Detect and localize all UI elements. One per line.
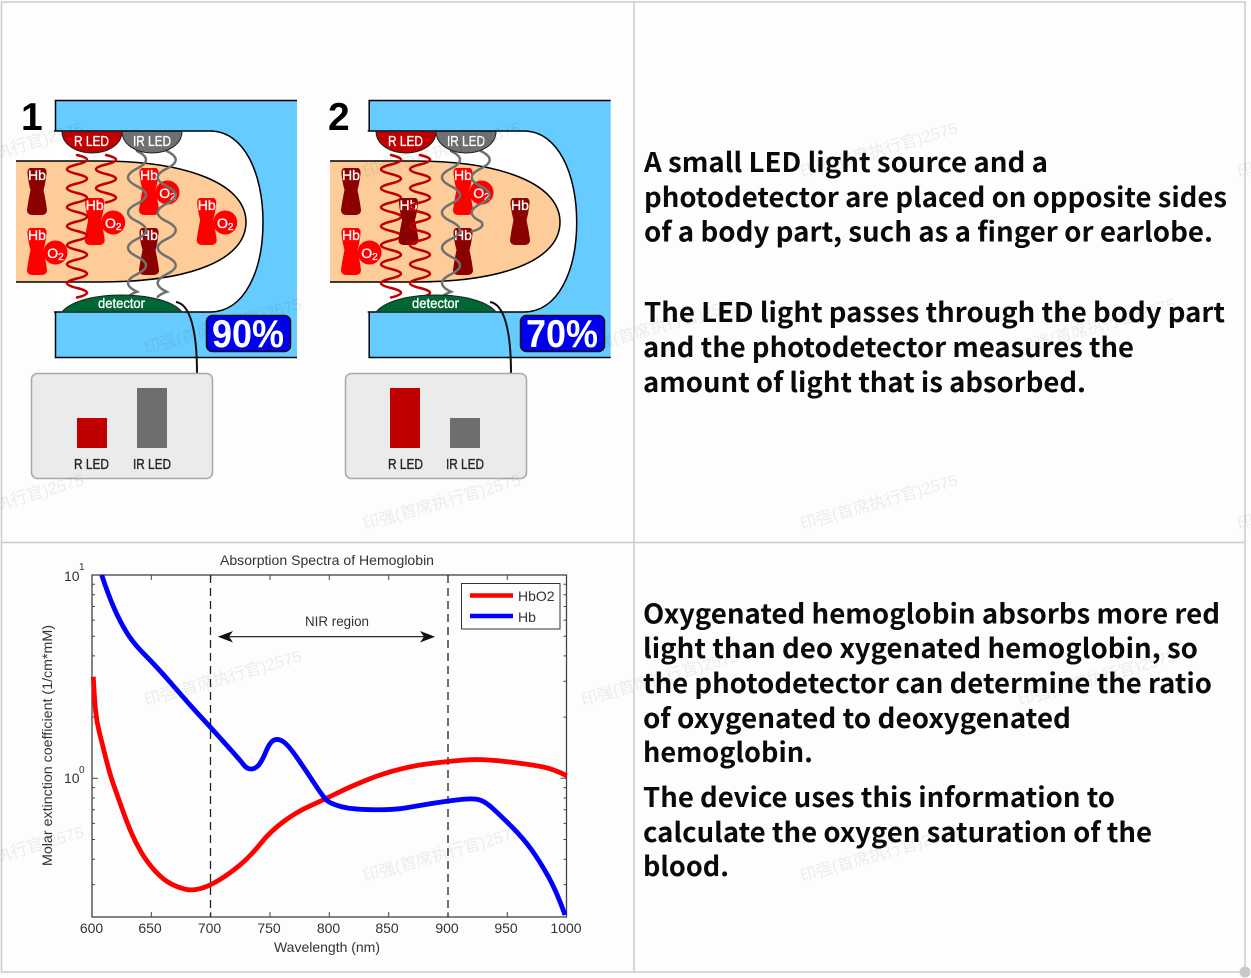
HbO2 molecule: 2 [228, 222, 234, 233]
watermark: 印强(首席执行官)2575 [579, 295, 741, 358]
watermark: 印强(首席执行官)2575 [798, 471, 960, 534]
text block: oxygenated hemoglobin absorption [643, 592, 1220, 770]
text block: oxygenated hemoglobin absorption: light than deo xygenated hemoglobin, so [643, 627, 1198, 666]
watermark: 印强(首席执行官)2575 [798, 823, 960, 886]
HbO2 molecule: O [47, 245, 58, 261]
monitor with signal bars: R LED [388, 456, 423, 473]
HbO2 molecule [453, 167, 494, 215]
text block: oxygen saturation: The device uses this information to [643, 776, 1115, 815]
HbO2 molecule: O [217, 215, 228, 231]
y axis tick labels: 1 [79, 562, 85, 573]
infrared light waves [442, 151, 490, 297]
monitor with signal bars: IR LED [133, 456, 171, 473]
y axis title: Molar extinction coefficient (1/cm*mM) [39, 625, 55, 866]
badge: 90%: 90% [212, 313, 284, 356]
Hb molecule [27, 167, 47, 215]
watermark: 印强(首席执行官)2575 [798, 119, 960, 182]
HbO2 molecule: O [361, 245, 372, 261]
text block: how the sensor is placed: photodetector are placed on opposite sides [644, 176, 1227, 215]
text block: oxygenated hemoglobin absorption: hemoglobin. [643, 731, 813, 770]
x axis tick labels: 950 [494, 920, 518, 936]
text block: oxygenated hemoglobin absorption: Oxygenated hemoglobin absorbs more red [643, 592, 1220, 632]
detector: detector [98, 295, 145, 311]
watermark: 印强(首席执行官)2575 [361, 471, 523, 534]
HbO2 molecule: Hb [140, 167, 158, 183]
text block: oxygen saturation [643, 776, 1152, 884]
monitor with signal bars [32, 374, 212, 478]
chart title: Absorption Spectra of Hemoglobin [220, 552, 434, 568]
watermark: 印强(首席执行官)2575 [142, 647, 304, 710]
x axis tick labels: 850 [375, 920, 399, 936]
Hb curve [102, 575, 565, 915]
Hb molecule [341, 167, 361, 215]
Hb molecule: Hb [511, 197, 529, 213]
text block: oxygen saturation: blood. [643, 845, 729, 884]
red light wave over molecule [410, 155, 430, 298]
red light waves [381, 155, 401, 298]
HbO2 molecule: 2 [116, 222, 122, 233]
Hb molecule: Hb [342, 167, 360, 183]
detector [376, 295, 496, 312]
IR LED: IR LED [133, 133, 171, 150]
text block: how the sensor is placed: of a body part, such as a finger or earlobe. [644, 210, 1213, 250]
Hb molecule [510, 197, 530, 245]
text block: how light is measured [643, 291, 1225, 400]
HbO2 molecule: Hb [198, 197, 216, 213]
IR LED [436, 132, 496, 153]
y axis tick labels: 10 [64, 770, 80, 786]
text block: oxygenated hemoglobin absorption: the photodetector can determine the ratio [643, 662, 1212, 701]
finger [16, 161, 246, 282]
x axis tick labels: 650 [138, 920, 162, 936]
detector [62, 295, 182, 312]
NIR region arrow [218, 613, 435, 642]
badge: 70%: 70% [526, 313, 598, 356]
Hb molecule: Hb [454, 227, 472, 243]
y axis tick labels: 0 [79, 765, 85, 776]
HbO2 molecule [197, 197, 237, 245]
HbO2 molecule: Hb [86, 197, 104, 213]
R LED: R LED [388, 133, 423, 150]
NIR region arrow: NIR region [305, 613, 369, 629]
Hb molecule [139, 227, 159, 275]
watermark: 印强(首席执行官)2575 [142, 295, 304, 358]
watermark: 印强(首席执行官)2575 [579, 647, 741, 710]
sensor housing [368, 100, 611, 358]
x axis tick labels: 800 [317, 920, 340, 936]
IR LED: IR LED [447, 133, 485, 150]
monitor with signal bars [346, 374, 526, 478]
red light waves [67, 155, 116, 298]
Hb molecule: Hb [140, 227, 158, 243]
HbO2 molecule: O [473, 185, 484, 201]
text block: oxygenated hemoglobin absorption: of oxygenated to deoxygenated [643, 697, 1071, 736]
text block: how the sensor is placed [643, 141, 1227, 250]
x axis tick labels: 700 [198, 920, 221, 936]
monitor with signal bars: R LED [74, 456, 109, 473]
HbO2 molecule: Hb [342, 227, 360, 243]
legend: Hb [518, 609, 536, 625]
text block: how light is measured: The LED light passes through the body part [644, 291, 1225, 330]
panel: pulse oximeter state 2 [328, 96, 611, 478]
x axis tick labels: 750 [257, 920, 281, 936]
text block: how the sensor is placed: A small LED light source and a [643, 141, 1048, 180]
x axis tick labels [80, 920, 582, 936]
HbO2 curve [93, 677, 567, 890]
R LED [62, 132, 122, 153]
detector wire [176, 302, 197, 373]
x axis tick labels: 600 [80, 920, 103, 936]
HbO2 molecule [139, 167, 180, 215]
NIR region boundaries [210, 575, 448, 917]
label: number 1: 1 [21, 96, 43, 139]
HbO2 molecule: O [159, 185, 170, 201]
x axis tick labels: 900 [435, 920, 459, 936]
label: number 2: 2 [328, 96, 350, 139]
axes frame and ticks [92, 575, 566, 917]
panel: pulse oximeter state 1 [16, 96, 297, 478]
watermark: 印强(首席执行官)2575 [361, 119, 523, 182]
HbO2 molecule: 2 [170, 192, 176, 203]
HbO2 molecule [27, 227, 68, 275]
R LED: R LED [74, 133, 109, 150]
x axis title: Wavelength (nm) [274, 939, 380, 955]
text block: how light is measured: and the photodetector measures the [643, 326, 1134, 365]
y axis tick labels: 10 [64, 568, 80, 584]
HbO2 molecule: 2 [372, 252, 378, 263]
HbO2 molecule: 2 [484, 192, 490, 203]
Hb molecule [398, 197, 418, 245]
watermark: 印强(首席执行官)2575 [1016, 647, 1178, 710]
detector: detector [412, 295, 459, 311]
chart: absorption spectra of hemoglobin [39, 552, 582, 955]
R LED [376, 132, 436, 153]
Hb molecule: Hb [28, 167, 46, 183]
x axis tick labels: 1000 [550, 920, 582, 936]
HbO2 molecule: Hb [28, 227, 46, 243]
watermark: 印强(首席执行官)2575 [1016, 295, 1178, 358]
infrared light waves [128, 151, 176, 297]
monitor with signal bars: IR LED [446, 456, 484, 473]
HbO2 molecule: 2 [58, 252, 64, 263]
legend [462, 584, 560, 629]
sensor housing [54, 100, 297, 358]
y axis tick labels [64, 562, 85, 786]
HbO2 molecule: O [105, 215, 116, 231]
Hb molecule [453, 227, 473, 275]
legend: HbO2 [518, 588, 555, 604]
text block: how light is measured: amount of light that is absorbed. [643, 361, 1086, 400]
HbO2 molecule [85, 197, 125, 245]
finger [330, 161, 560, 282]
watermark: 印强(首席执行官)2575 [361, 823, 523, 886]
HbO2 molecule [341, 227, 382, 275]
Hb molecule: Hb [400, 197, 418, 213]
detector wire [490, 302, 511, 373]
IR LED [122, 132, 182, 153]
text block: oxygen saturation: calculate the oxygen saturation of the [643, 811, 1152, 850]
watermark [0, 119, 1251, 886]
HbO2 molecule: Hb [454, 167, 472, 183]
